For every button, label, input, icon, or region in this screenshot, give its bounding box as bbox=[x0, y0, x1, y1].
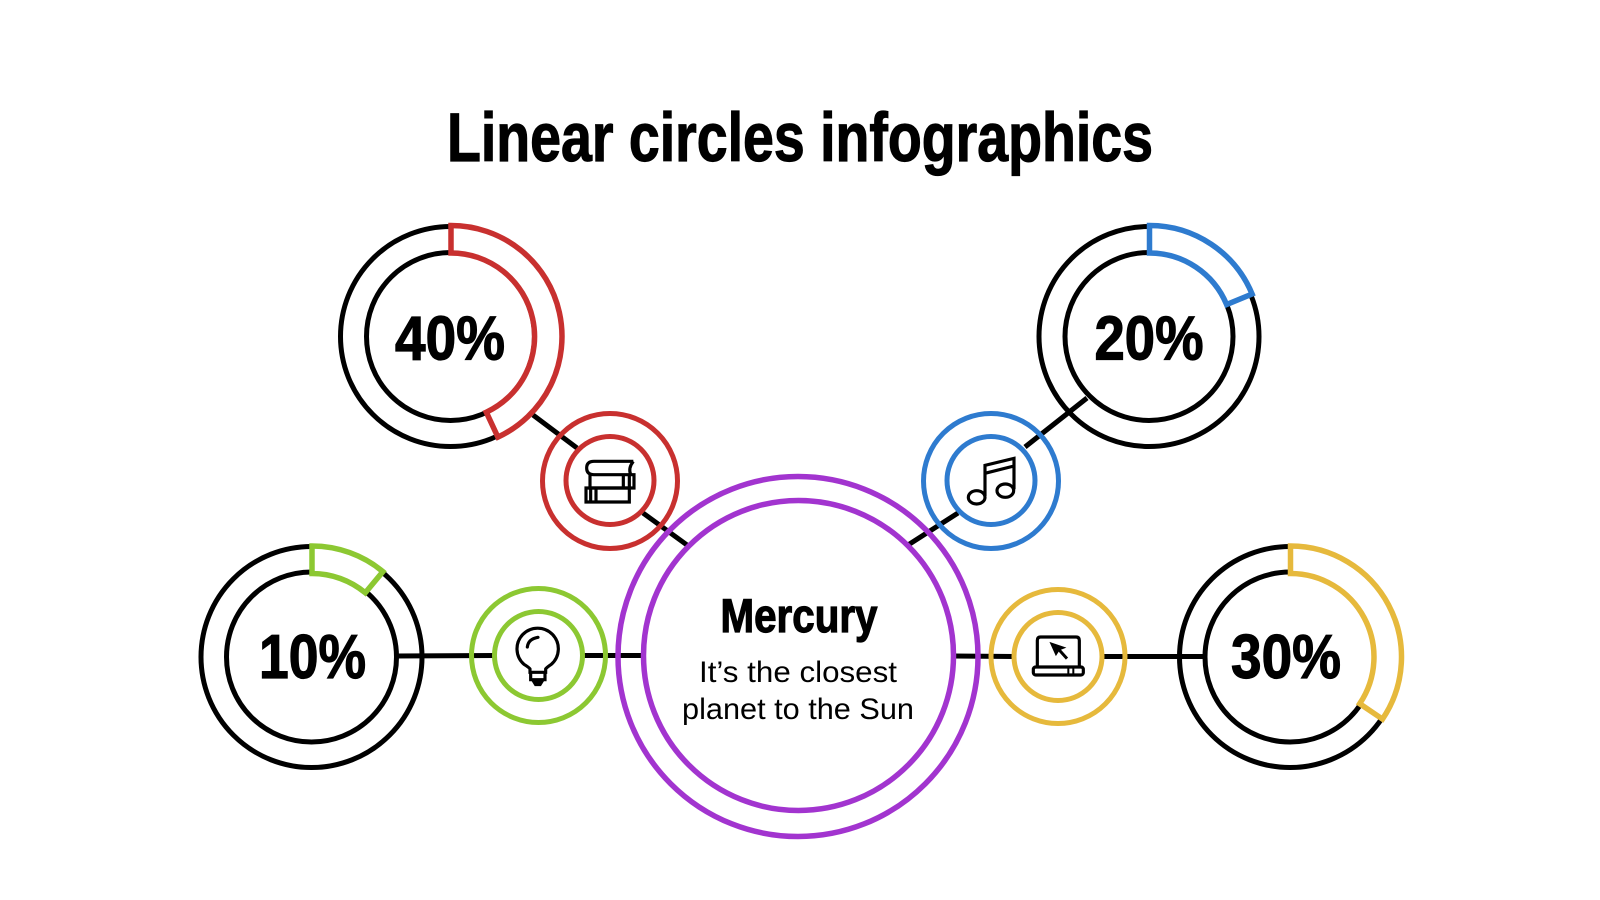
panel: bulb node bbox=[472, 588, 606, 722]
panel: 20% ring bbox=[1039, 225, 1259, 446]
panel: 40% ring: 40% bbox=[395, 304, 505, 374]
panel: 20% ring: 20% bbox=[1094, 304, 1204, 374]
panel: 40% ring bbox=[340, 226, 562, 446]
text block: description: planet to the Sun bbox=[682, 693, 914, 726]
icon: laptop with cursor bbox=[1033, 637, 1083, 675]
text block: description bbox=[682, 656, 914, 726]
icon: books bbox=[586, 461, 634, 502]
panel: 10% ring bbox=[201, 546, 422, 768]
panel: Mercury centre bbox=[618, 476, 978, 836]
text block: description: It’s the closest bbox=[699, 656, 898, 689]
panel: 10% ring: 10% bbox=[259, 623, 366, 692]
panel: 30% ring: 30% bbox=[1231, 623, 1341, 692]
icon: music notes bbox=[968, 458, 1014, 504]
icon: light bulb bbox=[517, 628, 558, 686]
panel: laptop node bbox=[991, 590, 1125, 724]
panel: books node bbox=[542, 414, 678, 548]
panel: music node bbox=[924, 414, 1058, 548]
connector lines bbox=[396, 398, 1205, 656]
title: Linear circles infographics bbox=[447, 99, 1153, 176]
heading: Mercury: Mercury bbox=[720, 589, 878, 642]
panel: 30% ring bbox=[1180, 546, 1401, 768]
